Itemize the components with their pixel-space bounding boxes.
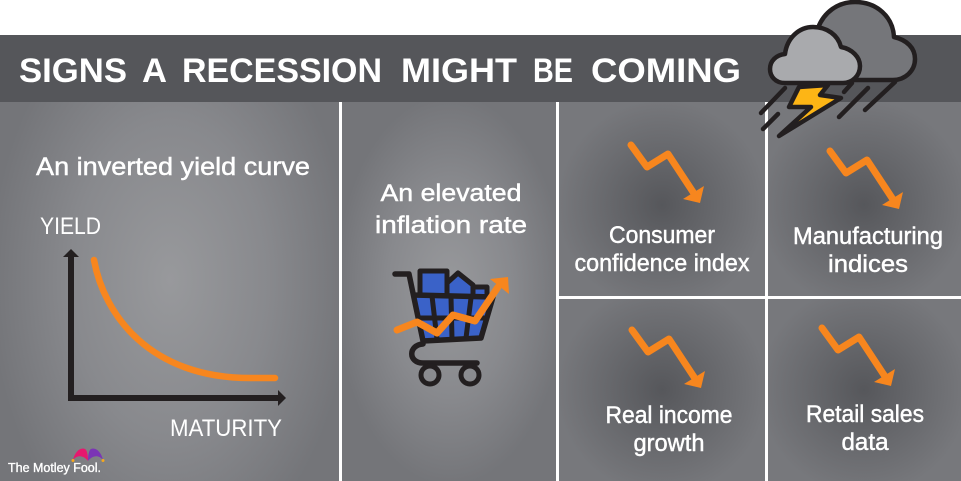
lightning bolt xyxy=(779,85,841,136)
title: BE xyxy=(533,52,573,90)
back cloud xyxy=(818,2,915,80)
label: consumer confidence index: Consumer xyxy=(609,222,715,249)
panel: retail sales data xyxy=(768,299,961,481)
label: manufacturing indices xyxy=(793,223,943,278)
label: retail sales data: data xyxy=(842,429,889,456)
axis label: yield: YIELD xyxy=(40,213,101,240)
panel: inverted yield curve xyxy=(0,102,339,481)
icon: storm clouds with lightning xyxy=(761,2,915,136)
label: retail sales data xyxy=(806,401,924,456)
logo: The Motley Fool: The Motley Fool. xyxy=(8,461,101,475)
label: manufacturing indices: Manufacturing xyxy=(793,223,943,250)
panel: consumer confidence index xyxy=(559,102,765,296)
label: manufacturing indices: indices xyxy=(828,251,908,278)
heading: an elevated inflation rate: inflation rate xyxy=(375,212,527,239)
axis label: maturity: MATURITY xyxy=(170,415,282,442)
title xyxy=(19,52,741,90)
icon: falling arrow xyxy=(632,330,705,388)
logo: The Motley Fool xyxy=(8,448,104,475)
chart: yield curve axes xyxy=(63,249,286,406)
label: real income growth: Real income xyxy=(606,402,732,429)
title: COMING xyxy=(591,52,741,90)
panel: manufacturing indices xyxy=(768,102,961,296)
panel: real income growth xyxy=(559,299,765,481)
icon: shopping cart with rising arrow xyxy=(395,271,509,384)
title: SIGNS xyxy=(19,52,127,90)
title: MIGHT xyxy=(401,52,517,90)
label: real income growth xyxy=(606,402,732,457)
title: RECESSION xyxy=(182,52,382,90)
heading: an elevated inflation rate: An elevated xyxy=(380,180,522,207)
label: consumer confidence index: confidence index xyxy=(574,250,750,277)
icon: falling arrow xyxy=(822,328,895,386)
label: retail sales data: Retail sales xyxy=(806,401,924,428)
heading: an inverted yield curve: An inverted yield curve xyxy=(36,153,310,181)
icon: falling arrow xyxy=(631,145,704,203)
front cloud xyxy=(770,27,860,83)
title band xyxy=(0,35,961,102)
title: A xyxy=(142,52,167,90)
heading: an elevated inflation rate xyxy=(375,180,527,239)
icon: falling arrow xyxy=(830,151,903,209)
panel: elevated inflation rate xyxy=(342,102,556,481)
label: consumer confidence index xyxy=(574,222,750,277)
chart: orange yield curve line xyxy=(94,260,275,378)
label: real income growth: growth xyxy=(634,430,704,457)
rain streaks xyxy=(761,82,895,129)
